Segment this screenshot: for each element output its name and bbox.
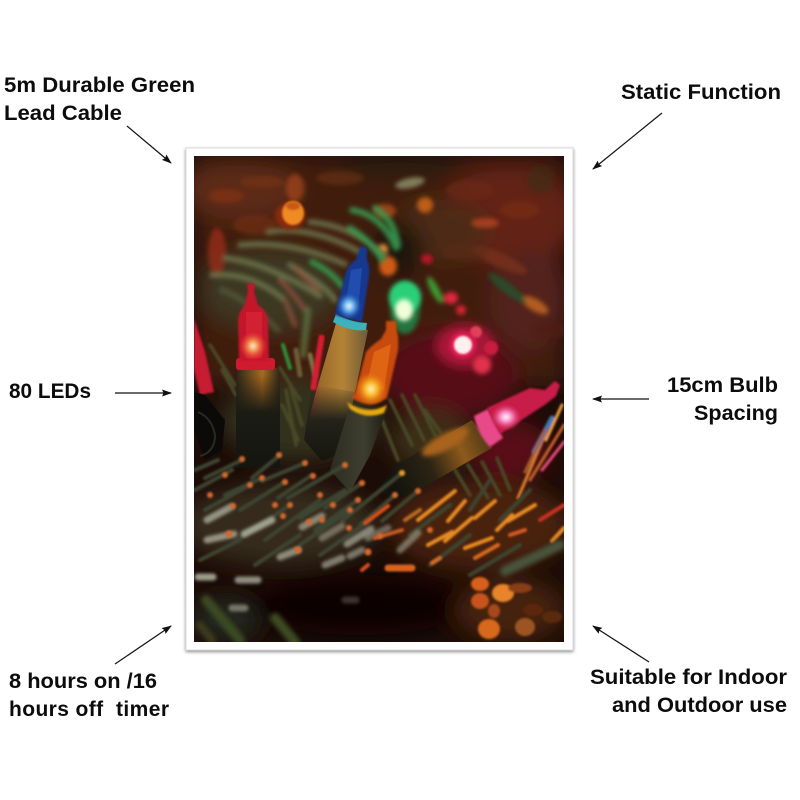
label: Suitable for Indoor and Outdoor use xyxy=(590,666,787,717)
arrow: to middle left xyxy=(115,392,171,394)
label: timer xyxy=(9,670,169,721)
bulb: red xyxy=(236,282,280,468)
arrow: to bottom right xyxy=(593,626,649,662)
bokeh: pink light xyxy=(435,324,498,374)
arrow: to top left xyxy=(127,126,171,163)
label: Static Function: Static Function xyxy=(621,81,781,104)
mid needles behind bulbs xyxy=(210,345,510,498)
label: 15cm Bulb Spacing: Spacing xyxy=(694,402,778,425)
front needles, dark stems xyxy=(195,455,530,575)
front needles, glowing orange xyxy=(362,491,564,570)
left edge red bulb xyxy=(194,318,214,395)
bulb: orange xyxy=(330,321,398,492)
label: Suitable for Indoor and Outdoor use: Suitable for Indoor xyxy=(590,666,787,689)
blurred green needles xyxy=(212,208,398,355)
blurred background colour xyxy=(180,152,580,642)
arrow: to bottom left xyxy=(115,626,171,664)
bulb: pink xyxy=(378,381,560,500)
label: timer: hours off timer xyxy=(9,698,169,721)
photo: Christmas tree lights xyxy=(180,152,580,642)
bokeh: orange light xyxy=(275,201,305,230)
needle tips xyxy=(207,452,433,556)
arrow: to middle right xyxy=(593,398,649,400)
label: 5m Durable Green Lead Cable xyxy=(4,74,195,125)
background bokeh xyxy=(208,166,568,338)
front needles, grey highlights xyxy=(198,507,418,608)
photo frame xyxy=(186,148,573,650)
arrow: to top right xyxy=(593,113,662,169)
label: 5m Durable Green Lead Cable: 5m Durable Green xyxy=(4,74,195,97)
label: 80 LEDs: 80 LEDs xyxy=(9,380,91,403)
bottom right bokeh xyxy=(471,577,562,639)
bulb: blue xyxy=(304,246,369,462)
label: 5m Durable Green Lead Cable: Lead Cable xyxy=(4,102,122,125)
needles lattice lower right xyxy=(518,405,564,498)
bokeh: green light xyxy=(389,281,421,334)
label: 15cm Bulb Spacing xyxy=(667,374,778,425)
label: Suitable for Indoor and Outdoor use: and Outdoor use xyxy=(612,694,787,717)
label: timer: 8 hours on /16 xyxy=(9,670,157,693)
label: 15cm Bulb Spacing: 15cm Bulb xyxy=(667,374,778,397)
bottom fir blur xyxy=(200,545,560,642)
